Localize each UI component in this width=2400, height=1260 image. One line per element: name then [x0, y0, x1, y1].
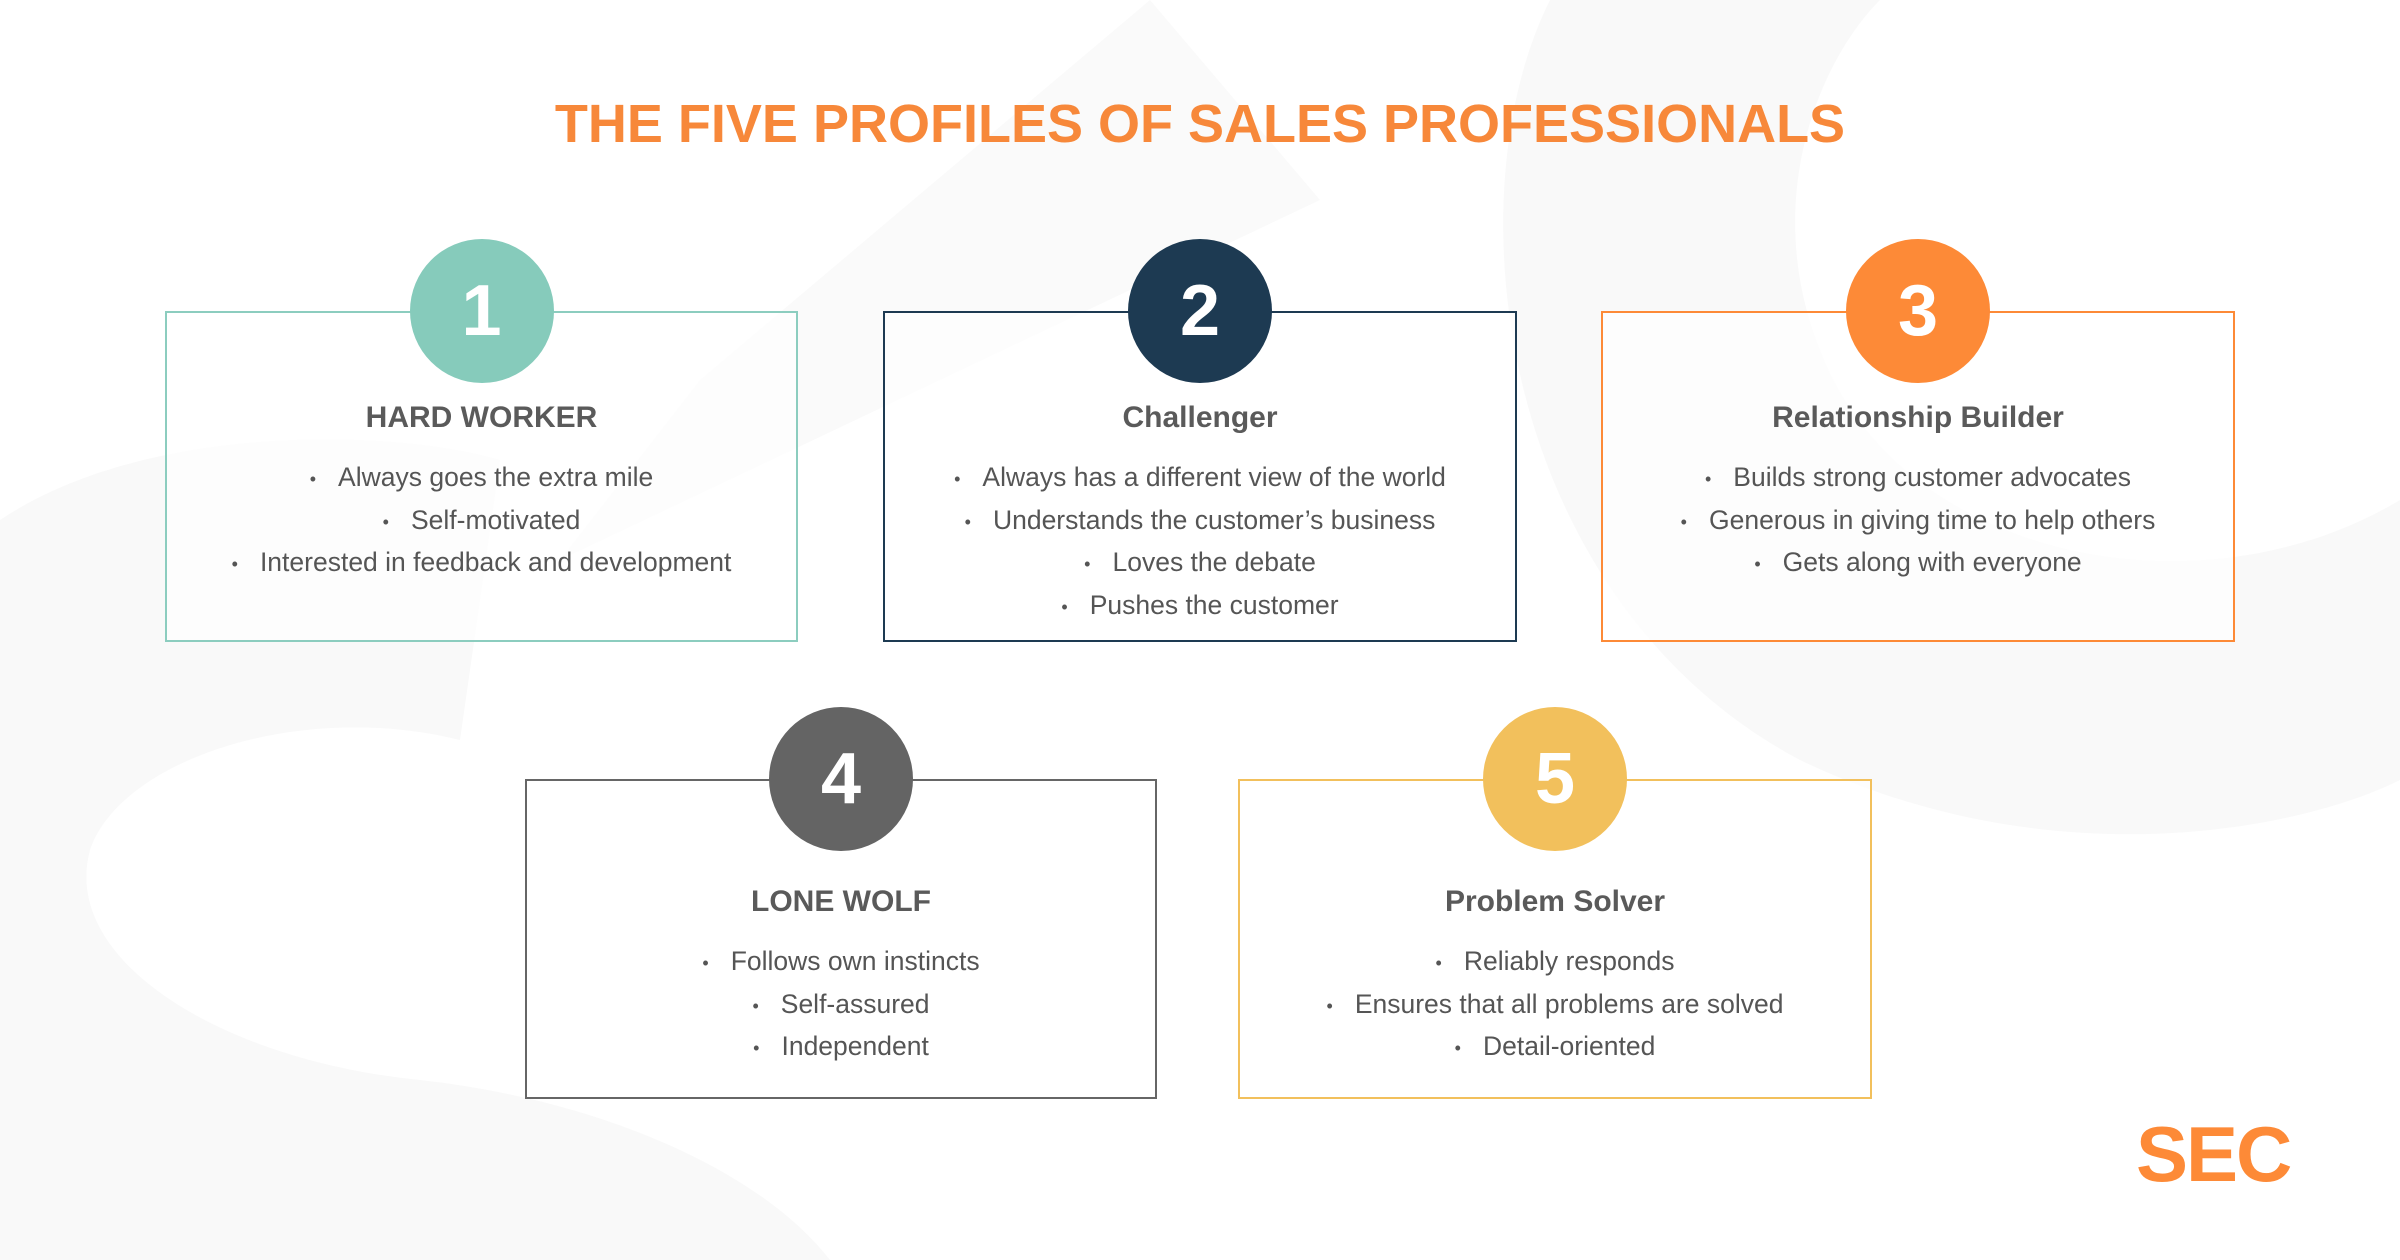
panel: relationship builder: [1601, 311, 2235, 642]
panel: problem solver: [1238, 779, 1872, 1099]
bullet list: Understands the customer’s business: [993, 504, 1435, 534]
bullet list: Reliably responds: [1464, 946, 1674, 976]
bullet list: Always goes the extra mile: [338, 462, 653, 492]
bullet list: •: [1705, 469, 1711, 489]
icon: number 5: 5: [1535, 739, 1575, 819]
bullet list: •: [965, 512, 971, 532]
bullet list: Detail-oriented: [1483, 1031, 1655, 1061]
bullet list: Self-assured: [781, 988, 930, 1018]
bullet list: Gets along with everyone: [1783, 547, 2082, 577]
icon: number 4: 4: [821, 739, 861, 819]
heading: Challenger: [1122, 401, 1278, 434]
icon: number 2: [1128, 239, 1272, 383]
bullet list: [1327, 946, 1783, 1061]
title: THE FIVE PROFILES OF SALES PROFESSIONALS: [555, 94, 1845, 154]
bullet list: [1681, 462, 2155, 577]
bullet list: Follows own instincts: [731, 946, 980, 976]
bullet list: Builds strong customer advocates: [1733, 462, 2131, 492]
icon: number 1: 1: [461, 271, 502, 351]
bullet list: Independent: [781, 1031, 929, 1061]
bullet list: Interested in feedback and development: [260, 547, 731, 577]
bullet list: Generous in giving time to help others: [1709, 504, 2155, 534]
bullet list: •: [232, 554, 238, 574]
icon: number 4: [769, 707, 913, 851]
bullet list: •: [1436, 953, 1442, 973]
icon: number 5: [1483, 707, 1627, 851]
icon: number 3: 3: [1898, 271, 1938, 351]
bullet list: •: [752, 996, 759, 1016]
icon: number 2: 2: [1180, 271, 1220, 351]
bullet list: [954, 462, 1446, 620]
bullet list: •: [1455, 1038, 1461, 1058]
bullet list: •: [1084, 554, 1090, 574]
bullet list: Ensures that all problems are solved: [1355, 988, 1783, 1018]
bullet list: [232, 462, 732, 577]
bullet list: •: [753, 1038, 759, 1058]
bullet list: Loves the debate: [1112, 547, 1316, 577]
logo: SEC: SEC: [2136, 1110, 2290, 1198]
bullet list: •: [702, 953, 709, 973]
bullet list: •: [1061, 596, 1068, 616]
bullet list: •: [383, 512, 389, 532]
panel: challenger: [883, 311, 1517, 642]
bullet list: •: [310, 469, 316, 489]
icon: number 3: [1846, 239, 1990, 383]
bullet list: Self-motivated: [411, 504, 580, 534]
bullet list: •: [954, 469, 960, 489]
icon: number 1: [410, 239, 554, 383]
bullet list: Pushes the customer: [1090, 590, 1339, 620]
bullet list: •: [1327, 996, 1333, 1016]
heading: LONE WOLF: [751, 885, 931, 918]
panel: hard worker: [165, 311, 798, 642]
panel: lone wolf: [525, 779, 1157, 1099]
heading: Problem Solver: [1445, 885, 1665, 918]
heading: HARD WORKER: [366, 401, 597, 434]
bullet list: •: [1754, 554, 1761, 574]
bullet list: [702, 946, 980, 1061]
bullet list: Always has a different view of the world: [982, 462, 1446, 492]
bullet list: •: [1681, 512, 1687, 532]
heading: Relationship Builder: [1772, 401, 2064, 434]
